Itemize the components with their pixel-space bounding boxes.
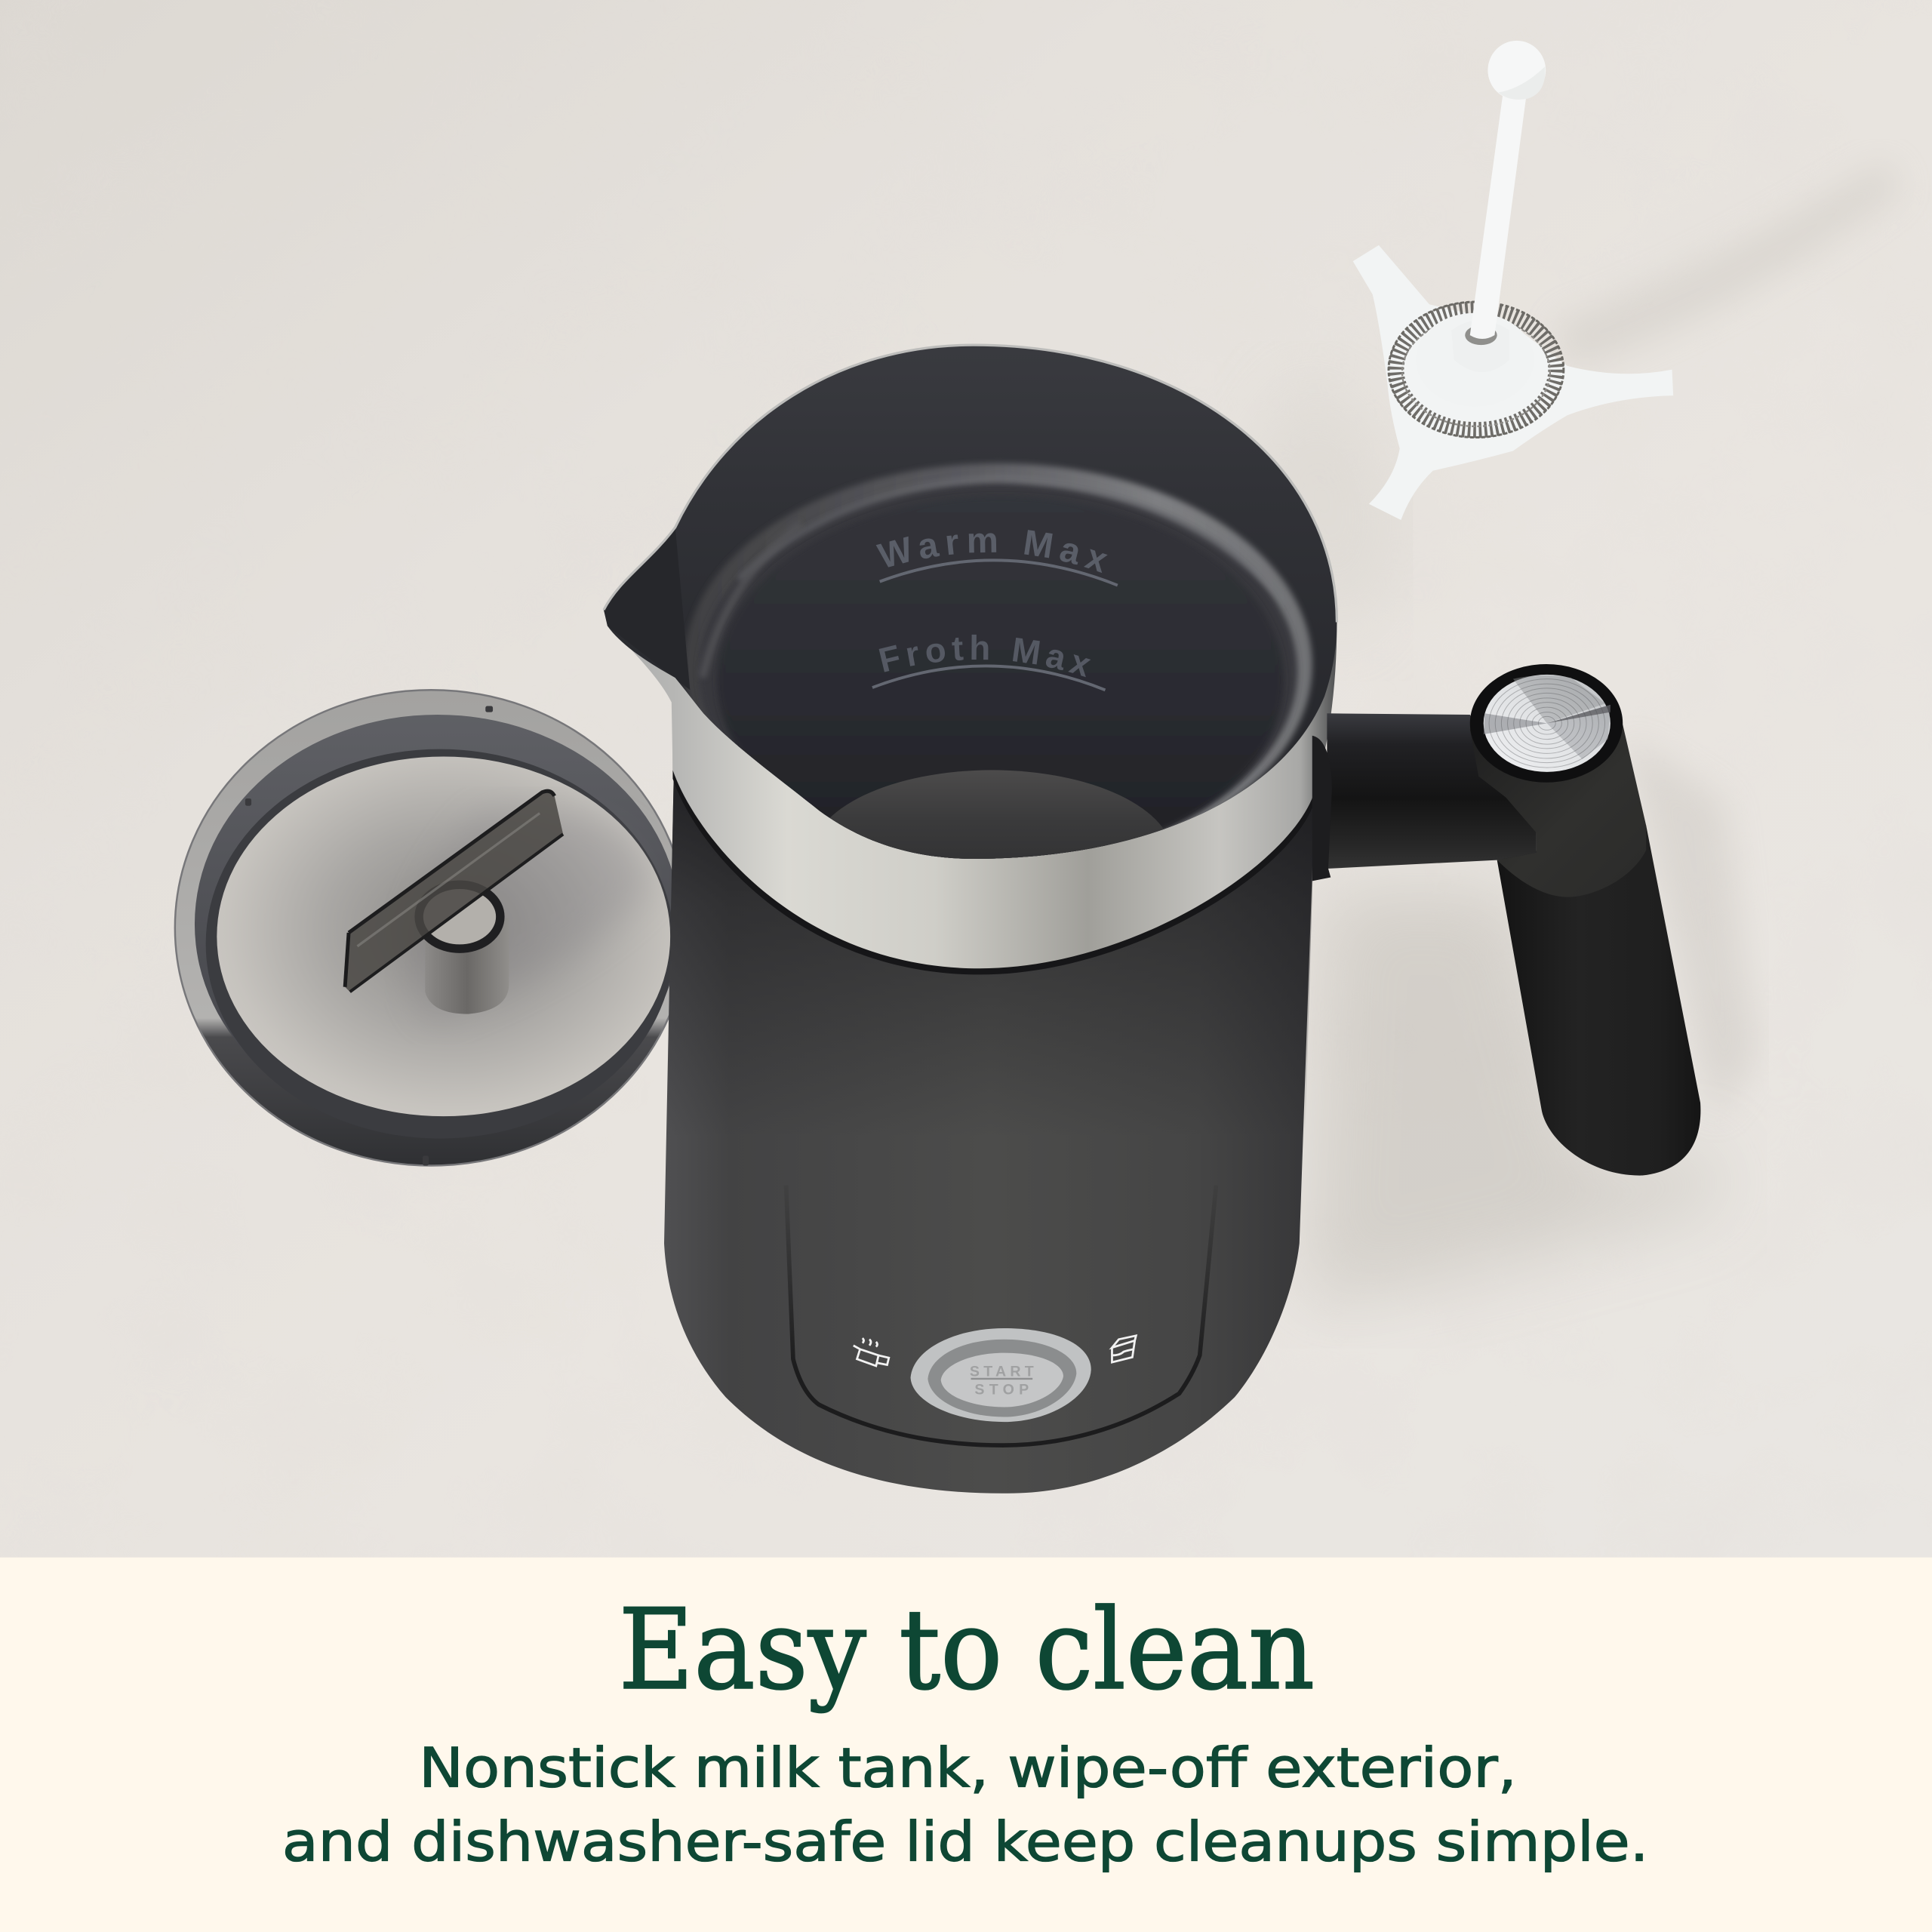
stainless steel band <box>604 610 1337 968</box>
whisk ball handle <box>1487 41 1546 100</box>
lid clear center <box>217 756 670 1116</box>
whisk center disk <box>1416 313 1534 407</box>
steel band under-shadow <box>672 740 1315 974</box>
body recessed panel line <box>786 1186 1216 1445</box>
lid lift tab <box>345 791 563 992</box>
lid outer rim <box>175 690 688 1165</box>
button label <box>970 1364 1034 1398</box>
spout interior <box>604 528 690 690</box>
whisk accessory <box>1353 41 1673 520</box>
tank upper wall <box>592 333 1355 875</box>
cast shadows on the surface <box>1232 160 1903 1306</box>
embossed label: Froth Max: Froth Max <box>878 634 1091 678</box>
rim highlight <box>604 345 1337 622</box>
description text <box>282 1736 1648 1873</box>
whisk shaft <box>1470 96 1526 339</box>
lid notches <box>245 706 493 1165</box>
heading: Easy to clean <box>619 1586 1315 1715</box>
whisk collar <box>1451 320 1509 372</box>
caption panel <box>0 1558 1932 1932</box>
embossed label: Warm Max: Warm Max <box>875 530 1108 573</box>
milk tank interior <box>604 346 1337 859</box>
lid plug stem <box>419 884 509 1014</box>
whisk tri-star base <box>1353 245 1673 520</box>
frother base body <box>664 764 1316 1494</box>
handle collar at body <box>1312 736 1332 881</box>
handle cap <box>1470 664 1623 783</box>
button label: START <box>970 1364 1034 1380</box>
body shell <box>664 764 1316 1494</box>
icon: milk carton <box>1112 1336 1136 1362</box>
handle grip <box>1497 826 1700 1176</box>
handle upper housing <box>1470 724 1646 897</box>
description text: and dishwasher-safe lid keep cleanups simple. <box>282 1810 1648 1873</box>
brushed metal disk <box>1484 675 1611 772</box>
lid dark inner ring <box>195 715 680 1134</box>
tank floor <box>830 770 1164 859</box>
start-stop button <box>911 1328 1091 1422</box>
icon: steaming cup <box>854 1338 889 1366</box>
tank shelf ring <box>684 463 1312 867</box>
tank well <box>717 573 1283 859</box>
handle <box>1312 664 1700 1176</box>
whisk coil spring <box>1389 302 1564 438</box>
handle neck <box>1327 713 1537 869</box>
button label: STOP <box>974 1381 1029 1398</box>
lid lying on the surface <box>175 690 688 1165</box>
description text: Nonstick milk tank, wipe-off exterior, <box>419 1736 1517 1799</box>
